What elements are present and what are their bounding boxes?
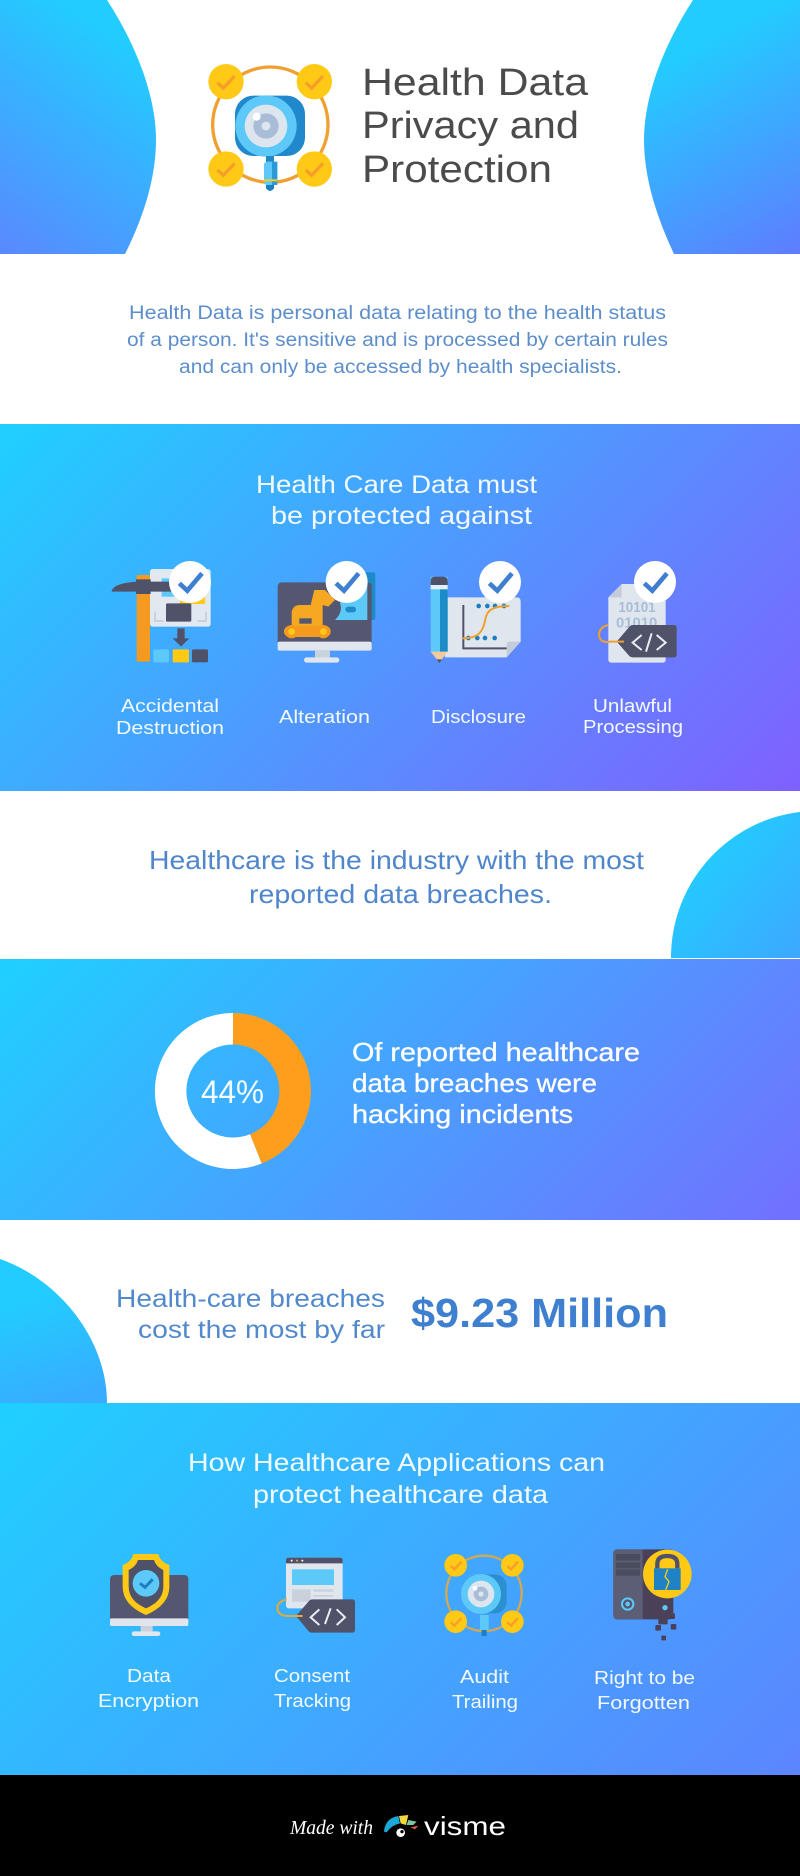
corner decorative shape: cost bbox=[0, 1259, 107, 1403]
label: data encryption: Encryption bbox=[98, 1691, 199, 1711]
label: unlawful processing bbox=[583, 696, 683, 737]
hacking statement: Of reported healthcare bbox=[352, 1037, 640, 1067]
intro paragraph bbox=[127, 303, 668, 378]
label: disclosure: Disclosure bbox=[431, 707, 526, 727]
icon: accidental destruction bbox=[112, 561, 211, 662]
donut chart: 44%: 44% bbox=[201, 1074, 264, 1110]
label: audit trailing: Audit bbox=[460, 1667, 509, 1687]
hacking statement: data breaches were bbox=[352, 1068, 597, 1098]
icon: right to be forgotten bbox=[613, 1549, 692, 1640]
statement: most reported breaches: reported data breaches. bbox=[249, 879, 552, 909]
intro paragraph: and can only be accessed by health specialists. bbox=[179, 357, 622, 378]
title: Health Data bbox=[362, 62, 589, 104]
label: audit trailing bbox=[452, 1667, 518, 1712]
statement: cost of breaches bbox=[116, 1285, 385, 1344]
label: right to be forgotten: Right to be bbox=[594, 1668, 695, 1688]
label: unlawful processing: Unlawful bbox=[593, 696, 672, 716]
threats heading: Health Care Data must bbox=[256, 471, 537, 499]
protections heading bbox=[188, 1449, 605, 1509]
icon: unlawful processing: 10101 bbox=[618, 600, 656, 616]
title: Privacy and bbox=[362, 105, 579, 147]
label: alteration: Alteration bbox=[279, 707, 370, 727]
label: data encryption bbox=[98, 1666, 199, 1711]
footer bar bbox=[0, 1775, 800, 1876]
label: right to be forgotten: Forgotten bbox=[597, 1693, 690, 1713]
label: consent tracking: Tracking bbox=[274, 1691, 351, 1711]
threats heading bbox=[256, 471, 537, 530]
label: audit trailing: Trailing bbox=[452, 1692, 518, 1712]
icon: disclosure bbox=[431, 561, 521, 663]
title: Protection bbox=[362, 149, 552, 191]
icon: consent tracking bbox=[277, 1558, 355, 1633]
statement: most reported breaches: Healthcare is the industry with the most bbox=[149, 845, 645, 875]
icon: magnifier audit logo bbox=[208, 64, 332, 191]
icon: unlawful processing: 01010 bbox=[616, 615, 657, 631]
label: unlawful processing: Processing bbox=[583, 717, 683, 737]
icon: audit trailing bbox=[444, 1554, 524, 1636]
hero left decorative shape bbox=[0, 0, 156, 254]
icon: visme logo bbox=[384, 1815, 418, 1837]
made with script: Made with bbox=[289, 1817, 373, 1839]
protections heading: How Healthcare Applications can bbox=[188, 1449, 605, 1477]
label: accidental destruction: Destruction bbox=[116, 718, 224, 738]
hacking statement bbox=[352, 1037, 640, 1129]
protections heading: protect healthcare data bbox=[253, 1481, 548, 1509]
label: right to be forgotten bbox=[594, 1668, 695, 1713]
intro paragraph: Health Data is personal data relating to the health status bbox=[129, 303, 666, 324]
statement: cost of breaches: cost the most by far bbox=[138, 1316, 385, 1344]
label: consent tracking bbox=[274, 1666, 351, 1711]
panel: protections bbox=[0, 1403, 800, 1775]
title bbox=[362, 62, 589, 191]
label: consent tracking: Consent bbox=[274, 1666, 350, 1686]
corner decorative shape: breaches bbox=[671, 812, 800, 958]
intro paragraph: of a person. It's sensitive and is processed by certain rules bbox=[127, 330, 668, 351]
icon: unlawful processing bbox=[599, 561, 677, 663]
icon: alteration bbox=[278, 561, 375, 663]
label: data encryption: Data bbox=[127, 1666, 172, 1686]
threats heading: be protected against bbox=[271, 502, 532, 530]
statement: cost of breaches: Health-care breaches bbox=[116, 1285, 385, 1313]
label: accidental destruction: Accidental bbox=[121, 696, 219, 716]
donut chart: 44% bbox=[155, 1013, 311, 1169]
hacking statement: hacking incidents bbox=[352, 1099, 573, 1129]
icon: data encryption bbox=[110, 1554, 188, 1636]
cost figure: $9.23 Million bbox=[411, 1290, 668, 1336]
label: accidental destruction bbox=[116, 696, 224, 738]
panel: hacking statistic bbox=[0, 959, 800, 1220]
visme wordmark: visme bbox=[424, 1811, 506, 1841]
panel: threats bbox=[0, 424, 800, 791]
statement: most reported breaches bbox=[149, 845, 645, 909]
hero right decorative shape bbox=[644, 0, 800, 254]
